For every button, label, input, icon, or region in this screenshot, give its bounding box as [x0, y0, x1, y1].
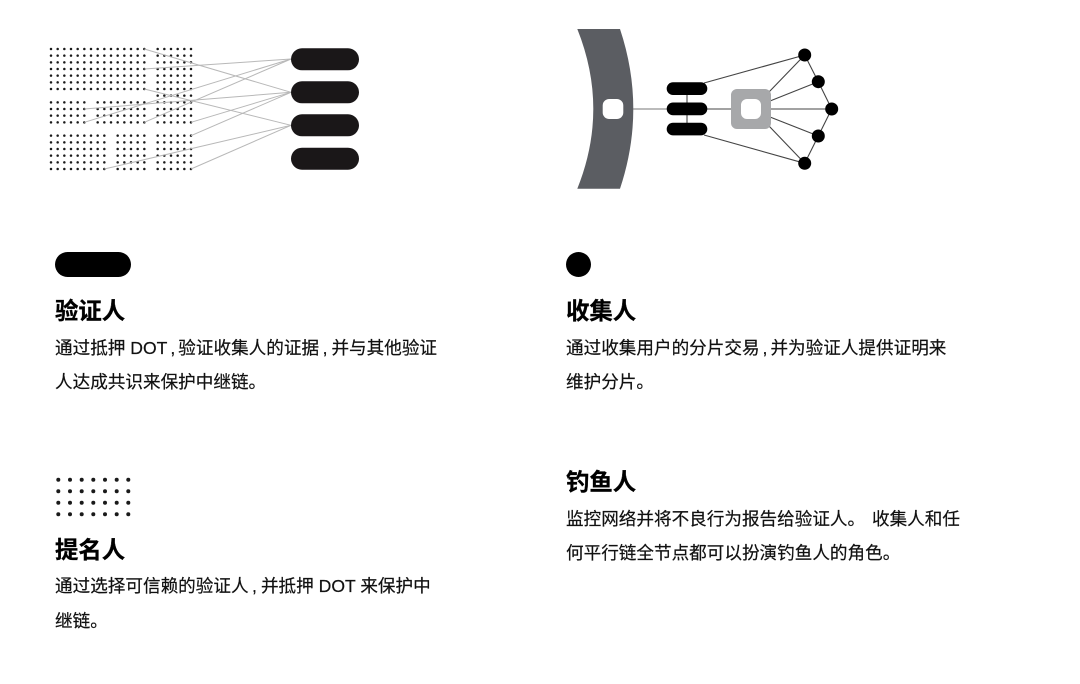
text: fisherman description [566, 509, 960, 563]
collator pills [667, 82, 707, 135]
heading: validator: 验证人 [55, 298, 125, 324]
text: collator description: 维护分片。 [566, 372, 654, 392]
collator dots [798, 48, 838, 170]
text: nominator description: 继链。 [55, 611, 108, 631]
text: validator description [55, 338, 437, 392]
arc slot [603, 99, 623, 119]
text: nominator description: 通过选择可信赖的验证人,并抵押 DOT 来保护中 [55, 576, 431, 596]
icon: nominator dots [56, 478, 130, 516]
icon: validator pill [55, 252, 131, 276]
relay chain arc [577, 29, 633, 189]
heading: collator: 收集人 [566, 298, 636, 324]
network lines [633, 55, 832, 163]
connecting lines [84, 49, 291, 169]
text: validator description: 通过抵押 DOT,验证收集人的证据,并与其他验证 [55, 338, 437, 358]
text: nominator description [55, 576, 431, 631]
text: collator description: 通过收集用户的分片交易,并为验证人提供证明来 [566, 338, 946, 358]
text: validator description: 人达成共识来保护中继链。 [55, 372, 266, 392]
text: fisherman description: 何平行链全节点都可以扮演钓鱼人的角色。 [566, 543, 900, 563]
heading: fisherman: 钓鱼人 [566, 469, 636, 495]
dot grid [51, 49, 191, 169]
text: fisherman description: 监控网络并将不良行为报告给验证人。 收集人和任 [566, 509, 960, 529]
diagram: collators network [577, 29, 838, 189]
diagram: validators network [50, 48, 359, 170]
validator pills [291, 48, 359, 170]
icon: collator dot [566, 252, 591, 276]
heading: nominator: 提名人 [55, 537, 125, 563]
grey parachain node [731, 89, 771, 129]
text: collator description [566, 338, 946, 392]
